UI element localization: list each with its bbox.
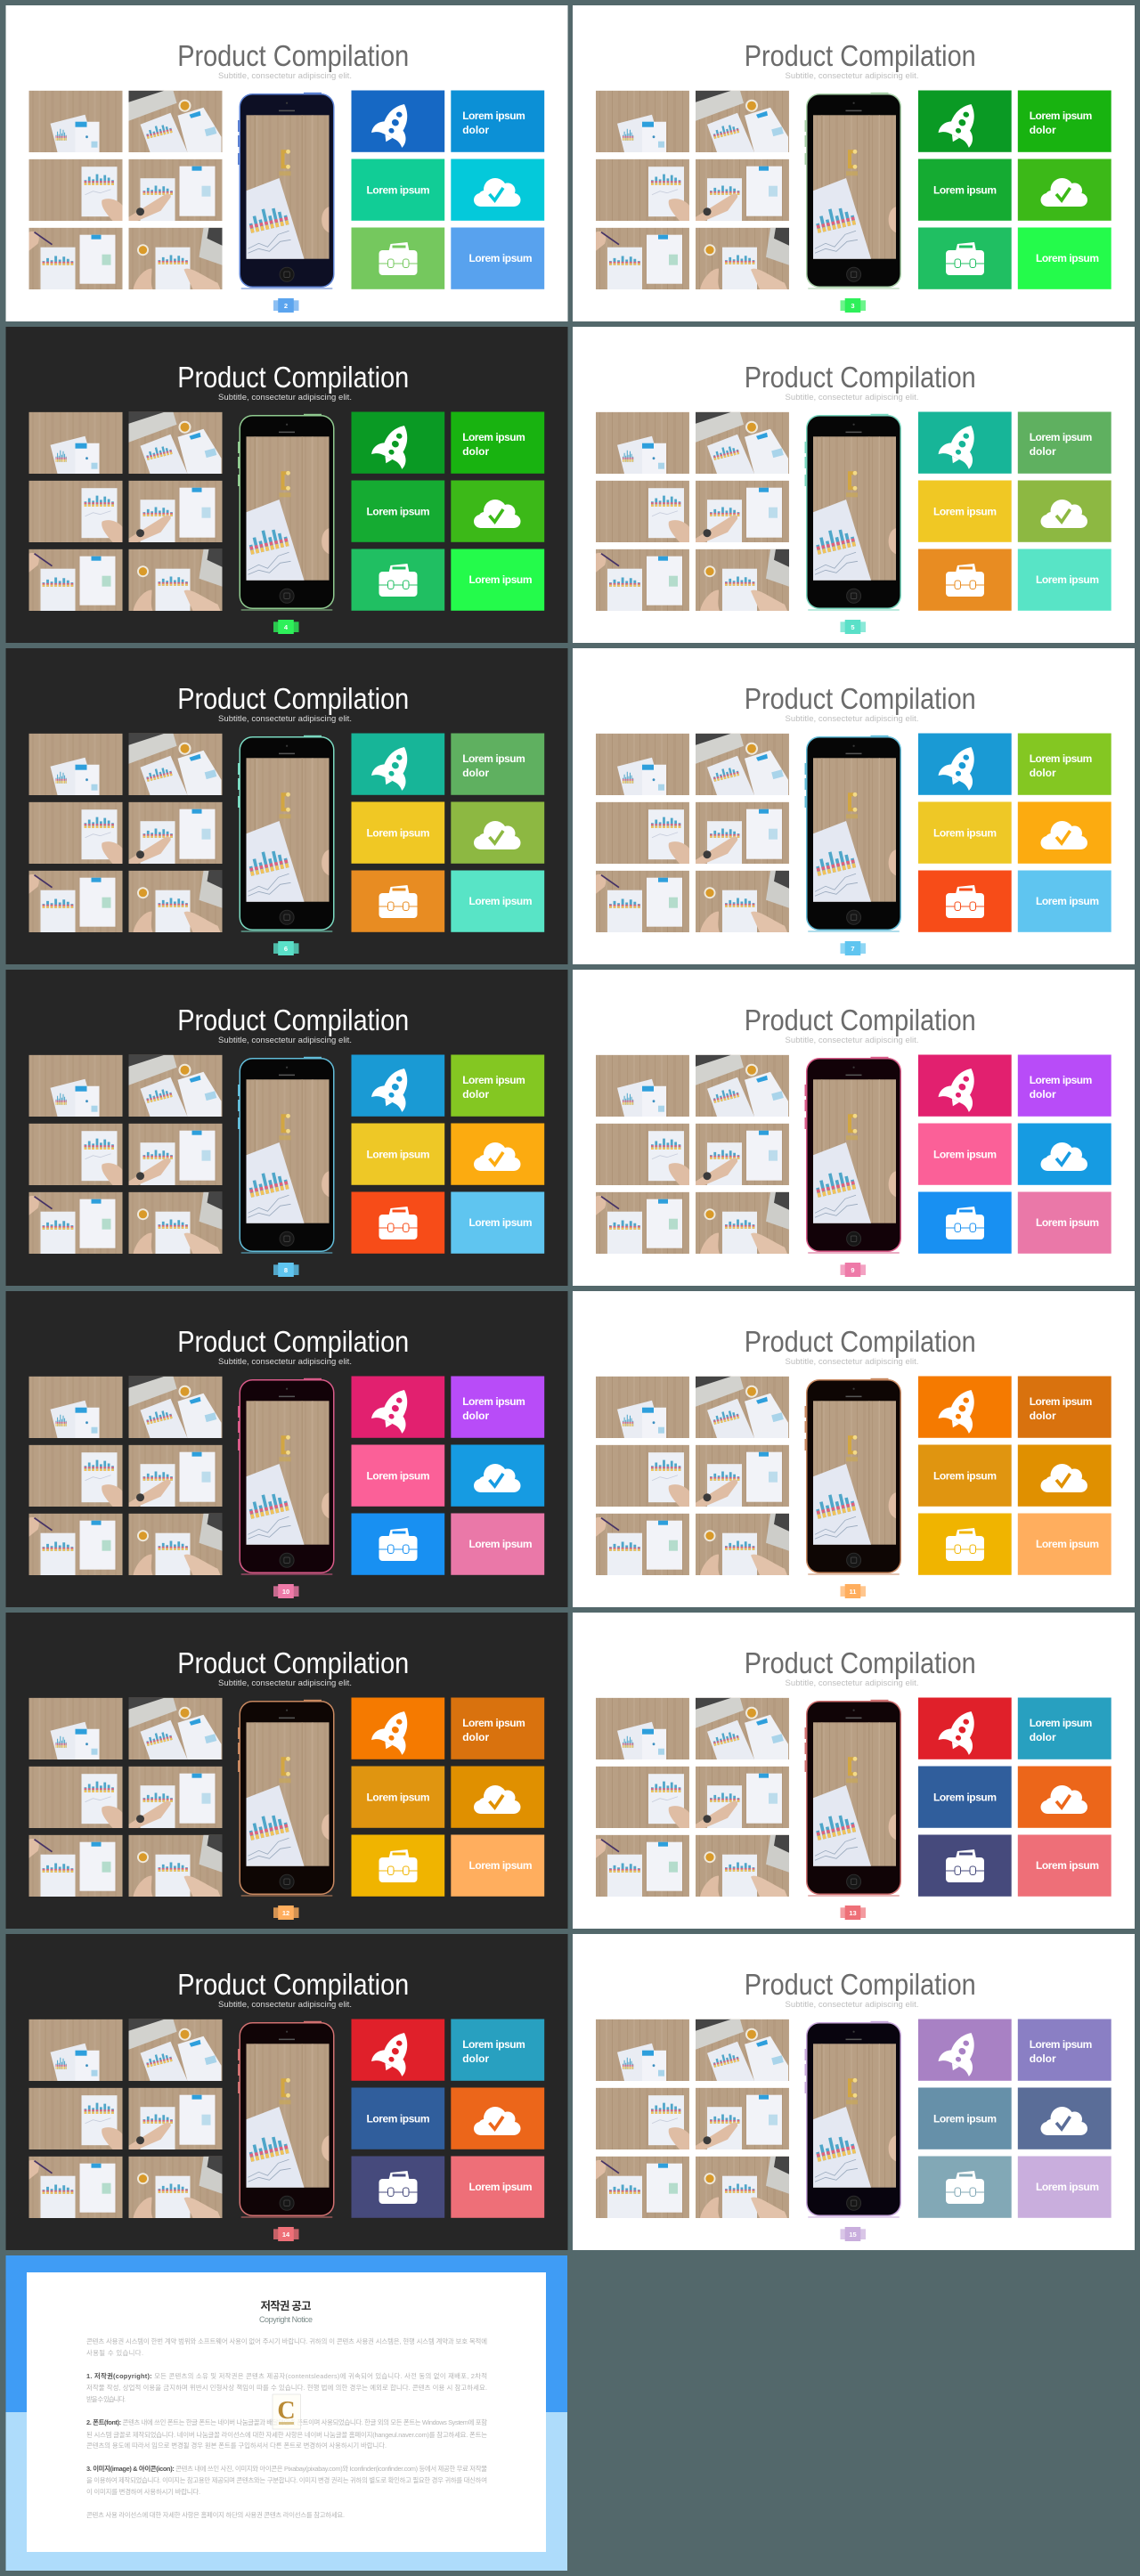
tile: Lorem ipsum: Lorem ipsum — [468, 1216, 533, 1229]
photo grid — [28, 734, 223, 932]
tile: cloud icon — [451, 1124, 544, 1185]
photo grid — [28, 1055, 223, 1254]
tile: Lorem ipsum dolor: dolor — [1030, 124, 1056, 136]
tile: Lorem ipsum dolor: Lorem ipsum — [1030, 1395, 1092, 1408]
paragraph: font: 된 시스템 글꼴로 제작되었습니다. 네이버 나눔글꼴 라이선스에 대한 자세한 사항은 네이버 나눔글꼴 홈페이지(hangeul.naver.com)를 참고하세요. 폰트는 — [86, 2431, 487, 2439]
tile: Lorem ipsum — [918, 2087, 1012, 2149]
tile: Lorem ipsum dolor: Lorem ipsum — [1030, 1074, 1092, 1086]
title: Product Compilation — [745, 1326, 976, 1359]
tile: rocket icon — [918, 734, 1012, 795]
tile: Lorem ipsum dolor: dolor — [462, 1731, 490, 1743]
page number — [273, 298, 299, 313]
page number: 15 — [849, 2231, 857, 2239]
tile: Lorem ipsum — [918, 1767, 1012, 1828]
subtitle: Subtitle, consectetur adipiscing elit. — [218, 714, 352, 724]
photo grid — [596, 1055, 789, 1254]
tile: Lorem ipsum — [1018, 2157, 1112, 2218]
logo watermark: C — [277, 2397, 296, 2425]
page number: 13 — [849, 1909, 857, 1917]
tile: Lorem ipsum: Lorem ipsum — [933, 1148, 997, 1160]
panel: slide 15 — [573, 1934, 1135, 2250]
page number: 6 — [284, 945, 288, 953]
tile: cloud icon — [451, 481, 544, 542]
subtitle: Subtitle, consectetur adipiscing elit. — [218, 71, 352, 81]
copyright heading: 저작권 공고 — [260, 2299, 312, 2312]
tile: cloud icon — [1018, 1444, 1112, 1507]
tile: Lorem ipsum dolor: Lorem ipsum — [1030, 110, 1092, 122]
tile: Lorem ipsum dolor: Lorem ipsum — [462, 1074, 525, 1086]
tile: Lorem ipsum dolor: Lorem ipsum — [1030, 1717, 1092, 1729]
tile: Lorem ipsum — [451, 1834, 544, 1897]
tile: cloud icon — [1018, 1767, 1112, 1828]
tile: Lorem ipsum: Lorem ipsum — [1036, 1859, 1099, 1872]
photo grid — [596, 2019, 789, 2218]
page number — [273, 620, 299, 634]
page number — [273, 1263, 299, 1277]
paragraph: font — [86, 2418, 487, 2450]
subtitle: Subtitle, consectetur adipiscing elit. — [786, 393, 919, 402]
tile: Lorem ipsum: Lorem ipsum — [367, 1469, 429, 1482]
tile: Lorem ipsum — [451, 871, 544, 932]
page number — [841, 1263, 866, 1277]
intro paragraph: 사용될 수 있습니다. — [86, 2349, 143, 2357]
tile: Lorem ipsum dolor — [451, 2019, 544, 2081]
tile: Lorem ipsum dolor — [1018, 2019, 1112, 2081]
tile: Lorem ipsum dolor — [1018, 1697, 1112, 1759]
title: Product Compilation — [177, 1004, 409, 1037]
panel: slide 11 — [573, 1291, 1135, 1607]
tile: Lorem ipsum dolor — [1018, 411, 1112, 474]
tile: Lorem ipsum: Lorem ipsum — [1036, 2181, 1099, 2193]
title: Product Compilation — [745, 1004, 976, 1037]
tile: Lorem ipsum dolor: Lorem ipsum — [462, 110, 525, 122]
photo grid — [28, 2019, 223, 2218]
tile: Lorem ipsum dolor: dolor — [462, 445, 490, 458]
tile: Lorem ipsum: Lorem ipsum — [468, 252, 533, 264]
subtitle: Subtitle, consectetur adipiscing elit. — [786, 1678, 919, 1688]
photo grid — [28, 1698, 223, 1897]
subtitle: Subtitle, consectetur adipiscing elit. — [786, 1357, 919, 1367]
tile: rocket icon — [351, 734, 444, 795]
tile: Lorem ipsum dolor: dolor — [462, 767, 490, 779]
tile: Lorem ipsum dolor: dolor — [1030, 1731, 1056, 1743]
tile: Lorem ipsum — [1018, 1834, 1112, 1897]
paragraph: image and icon — [86, 2465, 487, 2496]
tile: Lorem ipsum: Lorem ipsum — [1036, 1216, 1099, 1229]
page number: 10 — [282, 1588, 289, 1596]
tile: cloud icon — [1018, 801, 1112, 864]
tile: briefcase icon — [918, 228, 1012, 289]
tile: Lorem ipsum — [451, 228, 544, 289]
subtitle: Subtitle, consectetur adipiscing elit. — [218, 1678, 352, 1688]
tile: briefcase icon — [918, 871, 1012, 932]
photo grid — [596, 734, 789, 932]
tile: cloud icon — [1018, 158, 1112, 221]
panel: slide 12 — [5, 1613, 568, 1929]
phone mockup — [238, 1057, 335, 1254]
title: Product Compilation — [745, 1647, 976, 1680]
tile: Lorem ipsum: Lorem ipsum — [367, 505, 429, 517]
tile: Lorem ipsum: Lorem ipsum — [367, 2112, 429, 2125]
tile: rocket icon — [351, 1697, 444, 1759]
photo grid — [596, 91, 789, 289]
tile: briefcase icon — [918, 1834, 1012, 1897]
tile: Lorem ipsum — [918, 1444, 1012, 1507]
tile: rocket icon — [918, 91, 1012, 152]
tile: Lorem ipsum — [1018, 1191, 1112, 1254]
page number: 5 — [851, 623, 855, 631]
page number — [841, 2227, 866, 2241]
phone mockup — [238, 2021, 335, 2218]
phone mockup — [238, 93, 335, 289]
tile: briefcase icon — [918, 2157, 1012, 2218]
phone mockup — [805, 93, 901, 289]
tile: Lorem ipsum: Lorem ipsum — [933, 505, 997, 517]
tile: Lorem ipsum — [451, 549, 544, 611]
tile: rocket icon — [918, 1377, 1012, 1438]
tile: Lorem ipsum dolor: Lorem ipsum — [462, 1395, 525, 1408]
title: Product Compilation — [745, 40, 976, 73]
title: Product Compilation — [745, 683, 976, 716]
tile: Lorem ipsum dolor: dolor — [462, 124, 490, 136]
panel: slide 6 — [5, 648, 568, 964]
phone mockup — [805, 1378, 901, 1575]
photo grid — [28, 412, 223, 611]
page number: 14 — [282, 2231, 290, 2239]
tile: rocket icon — [351, 1054, 444, 1117]
tile: briefcase icon — [918, 549, 1012, 611]
intro paragraph — [86, 2337, 487, 2357]
page number: 12 — [282, 1909, 289, 1917]
tile: Lorem ipsum: Lorem ipsum — [468, 895, 533, 907]
tile: Lorem ipsum — [1018, 1514, 1112, 1575]
photo grid — [596, 1698, 789, 1897]
tile: rocket icon — [351, 1377, 444, 1438]
paragraph: font: 콘텐츠의 용도에 따라서 임으로 변경될 경우 원본 폰트를 구입하셔서 다른 폰트로 변경하여 사용하시기 바랍니다. — [86, 2442, 387, 2450]
tile: Lorem ipsum dolor — [1018, 91, 1112, 152]
panel: slide 9 — [573, 970, 1135, 1286]
tile: rocket icon — [351, 2019, 444, 2081]
title: Product Compilation — [177, 1647, 409, 1680]
panel: slide 14 — [5, 1934, 568, 2250]
panel: copyright notice — [5, 2255, 567, 2571]
tile: rocket icon — [918, 1697, 1012, 1759]
tile: Lorem ipsum: Lorem ipsum — [1036, 895, 1099, 907]
tile: Lorem ipsum — [351, 1444, 444, 1507]
tile: Lorem ipsum — [351, 2087, 444, 2149]
subtitle: Subtitle, consectetur adipiscing elit. — [218, 393, 352, 402]
title: Product Compilation — [745, 1969, 976, 2002]
tile: Lorem ipsum dolor: dolor — [1030, 445, 1056, 458]
tile: Lorem ipsum — [351, 158, 444, 221]
phone mockup — [805, 1700, 901, 1897]
panel: slide 7 — [573, 648, 1135, 964]
tile: Lorem ipsum dolor: Lorem ipsum — [462, 2038, 525, 2051]
tile: Lorem ipsum: Lorem ipsum — [1036, 573, 1099, 586]
tile: Lorem ipsum dolor: dolor — [1030, 1088, 1056, 1101]
title: Product Compilation — [177, 362, 409, 394]
tile: cloud icon — [451, 801, 544, 864]
phone mockup — [805, 1057, 901, 1254]
tile: Lorem ipsum dolor — [451, 411, 544, 474]
tile: cloud icon — [451, 1767, 544, 1828]
tile: Lorem ipsum dolor — [451, 1377, 544, 1438]
tile: Lorem ipsum: Lorem ipsum — [367, 1148, 429, 1160]
page number: 3 — [851, 302, 855, 310]
page number — [841, 1906, 866, 1920]
paragraph: image and icon: 을 이용하여 제작되었습니다. 이미지는 참고용만 제공되며 콘텐츠와는 구분합니다. 이미지 변경 권리는 귀하의 별도로 확인하고 필요한 경우 귀하를 대신하여 — [86, 2476, 487, 2484]
tile: Lorem ipsum dolor: Lorem ipsum — [1030, 431, 1092, 443]
page number — [841, 941, 866, 955]
subtitle: Subtitle, consectetur adipiscing elit. — [786, 1036, 919, 1045]
tile: Lorem ipsum: Lorem ipsum — [468, 573, 533, 586]
tile: Lorem ipsum — [1018, 871, 1112, 932]
panel: slide 5 — [573, 327, 1135, 643]
tile: rocket icon — [351, 411, 444, 474]
tile: briefcase icon — [351, 2157, 444, 2218]
page number: 4 — [284, 623, 289, 631]
tile: briefcase icon — [918, 1191, 1012, 1254]
panel: slide 10 — [5, 1291, 568, 1607]
tile: Lorem ipsum: Lorem ipsum — [468, 1538, 533, 1550]
phone mockup — [238, 1700, 335, 1897]
panel: slide 13 — [573, 1613, 1135, 1929]
page number — [273, 1584, 299, 1598]
page number — [273, 1906, 299, 1920]
page number — [273, 941, 299, 955]
panel: slide 8 — [5, 970, 568, 1286]
tile: Lorem ipsum dolor — [451, 734, 544, 795]
tile: Lorem ipsum dolor: dolor — [1030, 1410, 1056, 1422]
tile: cloud icon — [1018, 481, 1112, 542]
page number: 9 — [851, 1266, 855, 1274]
tile: Lorem ipsum: Lorem ipsum — [933, 1469, 997, 1482]
tile: Lorem ipsum: Lorem ipsum — [933, 826, 997, 839]
subtitle: Subtitle, consectetur adipiscing elit. — [786, 2000, 919, 2010]
panel: slide 2 — [5, 5, 568, 321]
tile: Lorem ipsum: Lorem ipsum — [1036, 1538, 1099, 1550]
tile: Lorem ipsum: Lorem ipsum — [933, 1791, 997, 1803]
tile: Lorem ipsum dolor — [451, 1697, 544, 1759]
intro paragraph: 콘텐츠 사용권 시스템이 한번 계약 범위와 소프트웨어 사용이 없어 주시기 바랍니다. 귀하의 이 콘텐츠 사용권 시스템은, 현행 시스템 계약과 보호 목적에 — [86, 2337, 487, 2345]
subtitle: Subtitle, consectetur adipiscing elit. — [218, 2000, 352, 2010]
closing paragraph: 콘텐츠 사용 라이선스에 대한 자세한 사항은 홈페이지 하단의 사용권 콘텐츠 라이선스를 참고하세요. — [86, 2511, 345, 2519]
logo watermark — [273, 2394, 301, 2429]
tile: Lorem ipsum — [351, 481, 444, 542]
tile: Lorem ipsum dolor: dolor — [1030, 2052, 1056, 2065]
tile: cloud icon — [451, 1444, 544, 1507]
title: Product Compilation — [177, 1326, 409, 1359]
paragraph: font: 2. 폰트(font): 콘텐츠 내에 쓰인 폰트는 한글 폰트는 네이버 나눔글꼴과 배달의민족 폰트이며 사용되었습니다. 한글 외의 모든 폰트는 Windows System에 포함 — [86, 2418, 487, 2426]
paragraph: copyright — [86, 2372, 487, 2403]
phone mockup — [238, 414, 335, 611]
tile: Lorem ipsum — [1018, 549, 1112, 611]
title: Product Compilation — [177, 40, 409, 73]
tile: cloud icon — [451, 158, 544, 221]
tile: rocket icon — [918, 1054, 1012, 1117]
tile: briefcase icon — [351, 1514, 444, 1575]
page number: 8 — [284, 1266, 288, 1274]
tile: Lorem ipsum — [918, 801, 1012, 864]
paragraph: copyright: 저작물 작성, 상업적 이용을 금지하며 위반시 민형사상 책임이 따를 수 있습니다. 현행 법에 의한 경우는 예외로 합니다. 콘텐츠 이용 시 참고하세요. — [86, 2384, 487, 2392]
photo grid — [28, 1377, 223, 1575]
copyright subheading: Copyright Notice — [259, 2315, 313, 2324]
tile: Lorem ipsum: Lorem ipsum — [367, 826, 429, 839]
page number: 2 — [284, 302, 288, 310]
panel: slide 3 — [573, 5, 1135, 321]
tile: briefcase icon — [351, 228, 444, 289]
tile: Lorem ipsum — [351, 1124, 444, 1185]
photo grid — [28, 91, 223, 289]
tile: Lorem ipsum: Lorem ipsum — [1036, 252, 1099, 264]
tile: Lorem ipsum dolor: Lorem ipsum — [462, 431, 525, 443]
subtitle: Subtitle, consectetur adipiscing elit. — [786, 714, 919, 724]
panel: slide 4 — [5, 327, 568, 643]
tile: Lorem ipsum dolor — [1018, 1377, 1112, 1438]
tile: briefcase icon — [351, 1834, 444, 1897]
tile: Lorem ipsum — [918, 481, 1012, 542]
tile: briefcase icon — [351, 549, 444, 611]
subtitle: Subtitle, consectetur adipiscing elit. — [218, 1357, 352, 1367]
tile: Lorem ipsum dolor — [1018, 1054, 1112, 1117]
tile: Lorem ipsum dolor: Lorem ipsum — [462, 752, 525, 765]
tile: Lorem ipsum: Lorem ipsum — [933, 2112, 997, 2125]
tile: Lorem ipsum — [351, 801, 444, 864]
phone mockup — [238, 1378, 335, 1575]
title: Product Compilation — [177, 1969, 409, 2002]
tile: rocket icon — [918, 2019, 1012, 2081]
tile: Lorem ipsum: Lorem ipsum — [367, 1791, 429, 1803]
subtitle: Subtitle, consectetur adipiscing elit. — [786, 71, 919, 81]
paragraph: copyright: 받을 수 있습니다. — [86, 2395, 126, 2403]
tile: Lorem ipsum dolor: dolor — [1030, 767, 1056, 779]
tile: Lorem ipsum dolor: Lorem ipsum — [1030, 2038, 1092, 2051]
title: Product Compilation — [745, 362, 976, 394]
paragraph: copyright: 1. 저작권(copyright): 모든 콘텐츠의 소유 및 저작권은 콘텐츠 제공자(contentsleaders)에 귀속되어 있습니다. 사전 동의 없이 재배포, 2차적 — [86, 2372, 487, 2380]
tile: Lorem ipsum dolor: dolor — [462, 1410, 490, 1422]
phone mockup — [805, 735, 901, 932]
tile: cloud icon — [1018, 1124, 1112, 1185]
tile: Lorem ipsum — [351, 1767, 444, 1828]
page number — [273, 2227, 299, 2241]
tile: briefcase icon — [351, 1191, 444, 1254]
tile: briefcase icon — [351, 871, 444, 932]
paragraph: image and icon: 이 이미지를 변경하여 사용하시기 바랍니다. — [86, 2488, 200, 2496]
phone mockup — [238, 735, 335, 932]
tile: Lorem ipsum — [451, 1191, 544, 1254]
tile: briefcase icon — [918, 1514, 1012, 1575]
page number — [841, 298, 866, 313]
paragraph: image and icon: 3. 이미지(image) & 아이콘(icon): 콘텐츠 내에 쓰인 사진, 이미지와 아이콘은 Pixabay(pixabay.com)와 Iconfinder(iconfinder.com) 등에서 제공한 무료 저작물 — [86, 2465, 487, 2473]
tile: cloud icon — [451, 2087, 544, 2149]
page number — [841, 620, 866, 634]
phone mockup — [805, 2021, 901, 2218]
page number: 7 — [851, 945, 855, 953]
tile: Lorem ipsum dolor: Lorem ipsum — [1030, 752, 1092, 765]
tile: rocket icon — [351, 91, 444, 152]
tile: Lorem ipsum — [918, 158, 1012, 221]
tile: cloud icon — [1018, 2087, 1112, 2149]
photo grid — [596, 412, 789, 611]
tile: Lorem ipsum: Lorem ipsum — [367, 183, 429, 196]
photo grid — [596, 1377, 789, 1575]
tile: Lorem ipsum: Lorem ipsum — [933, 183, 997, 196]
tile: Lorem ipsum — [451, 2157, 544, 2218]
tile: Lorem ipsum dolor — [1018, 734, 1112, 795]
subtitle: Subtitle, consectetur adipiscing elit. — [218, 1036, 352, 1045]
tile: Lorem ipsum dolor: dolor — [462, 2052, 490, 2065]
page number: 11 — [850, 1588, 856, 1596]
tile: Lorem ipsum — [451, 1514, 544, 1575]
tile: Lorem ipsum dolor — [451, 1054, 544, 1117]
tile: Lorem ipsum dolor: Lorem ipsum — [462, 1717, 525, 1729]
phone mockup — [805, 414, 901, 611]
tile: Lorem ipsum — [1018, 228, 1112, 289]
tile: Lorem ipsum: Lorem ipsum — [468, 1859, 533, 1872]
title: Product Compilation — [177, 683, 409, 716]
tile: Lorem ipsum: Lorem ipsum — [468, 2181, 533, 2193]
tile: Lorem ipsum dolor: dolor — [462, 1088, 490, 1101]
tile: Lorem ipsum — [918, 1124, 1012, 1185]
page number — [841, 1584, 866, 1598]
tile: rocket icon — [918, 411, 1012, 474]
tile: Lorem ipsum dolor — [451, 91, 544, 152]
